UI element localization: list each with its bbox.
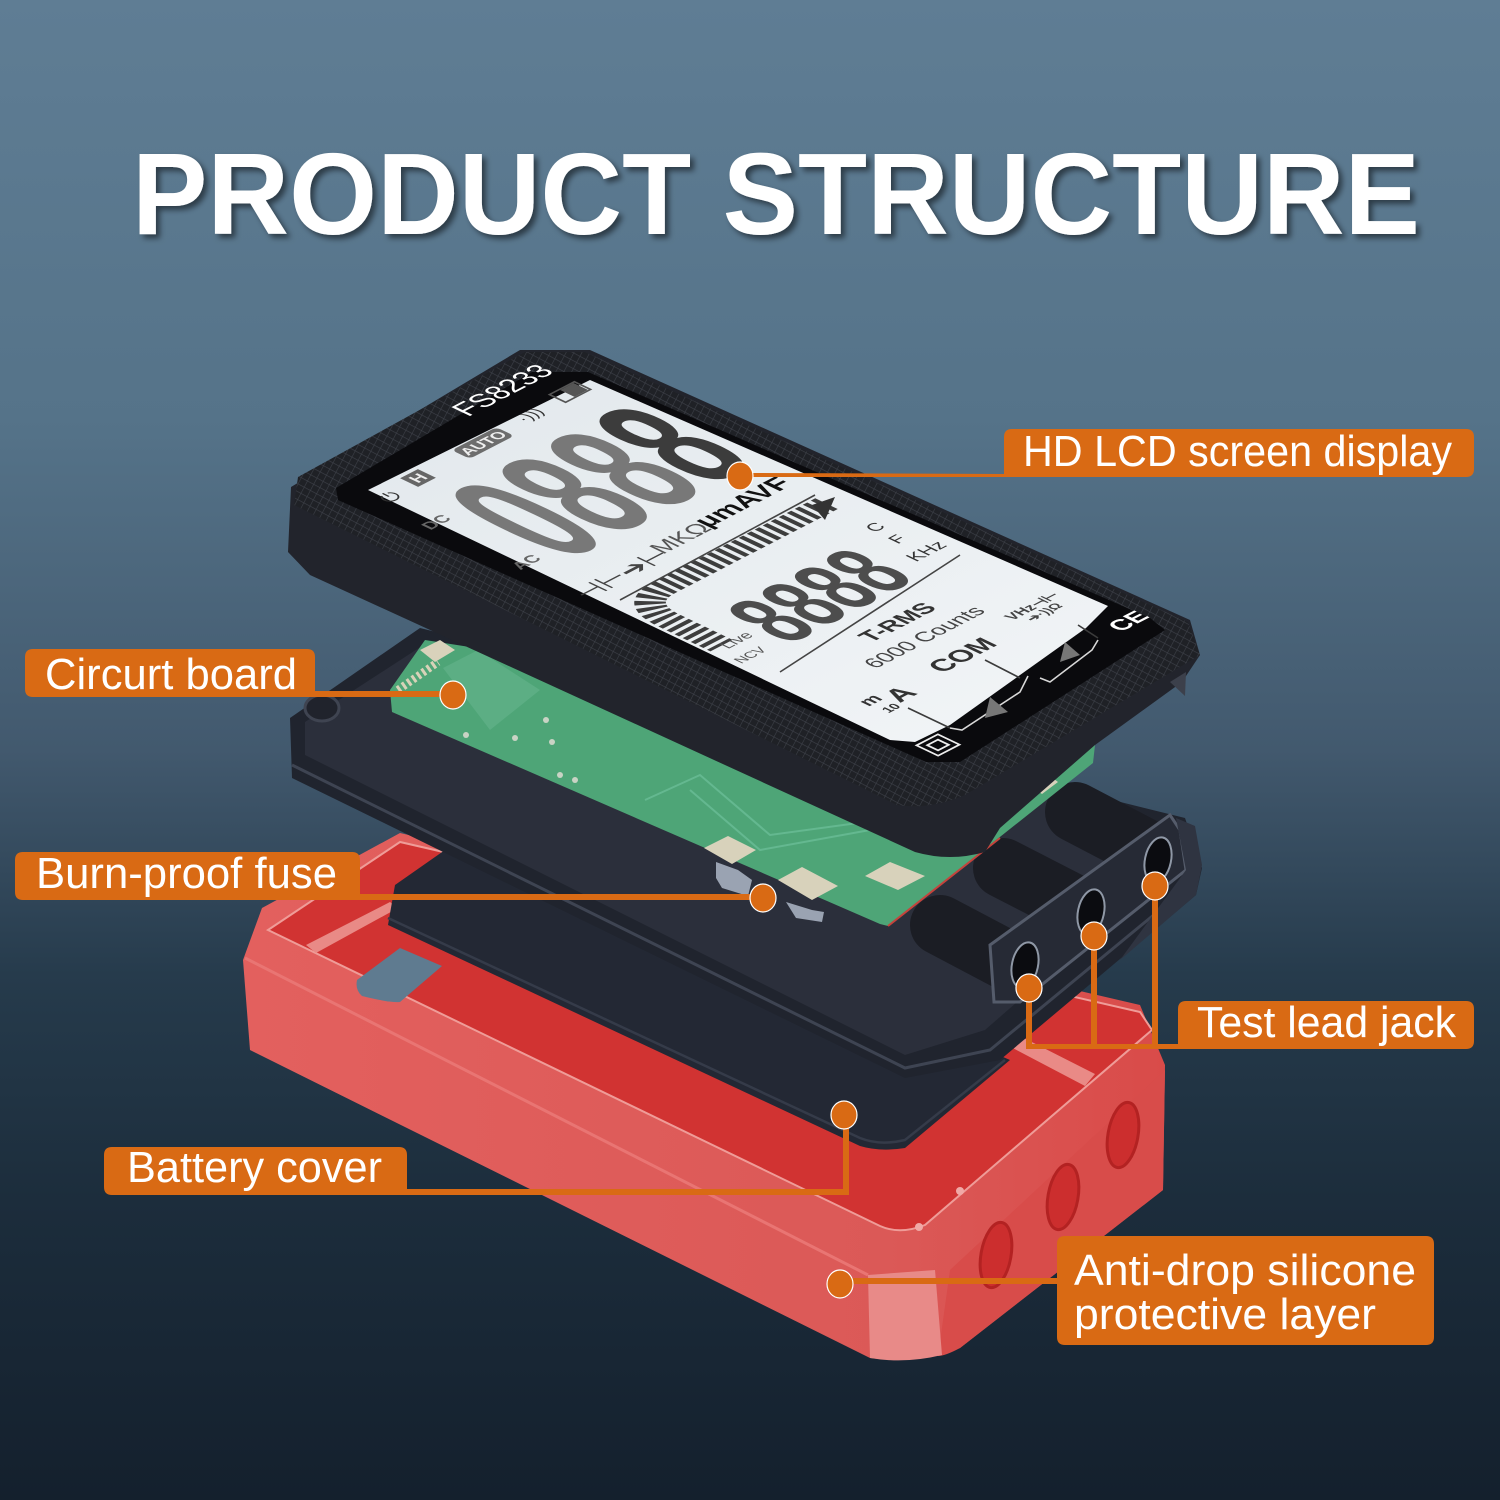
current units: μmAVF — [686, 473, 799, 531]
meter top unit: 10 — [878, 701, 904, 715]
meter top unit: NCV — [730, 644, 771, 665]
meter top unit: ➔·))Ω — [1022, 601, 1066, 623]
board vias — [463, 717, 578, 783]
hold icon: H — [404, 471, 432, 485]
lcd divider lines — [620, 495, 960, 672]
counts label: 6000 Counts — [857, 603, 991, 671]
case window slot — [357, 948, 442, 1002]
end block — [1120, 818, 1202, 960]
main reading digits: 0888 — [398, 382, 798, 581]
current jack label: A — [877, 683, 925, 706]
lcd panel — [368, 380, 1108, 742]
capacitor and diode symbols: ⊣⊢➔⊢ — [565, 545, 679, 603]
gauge arrow — [812, 497, 835, 520]
meter top unit: KHz — [902, 539, 952, 564]
meter side body — [288, 350, 1200, 857]
t-rms label: T-RMS — [852, 599, 943, 645]
red silicone protective case — [243, 833, 1165, 1360]
circuit board — [390, 640, 1095, 926]
callout: circuit board — [25, 649, 466, 709]
resistance units: MKΩ — [643, 519, 718, 557]
meter black glass — [336, 372, 1165, 762]
temperature and frequency units: C — [860, 520, 890, 534]
battery cover edge — [388, 918, 1005, 1143]
meter top unit: m — [854, 692, 888, 709]
tray screw post — [305, 695, 339, 721]
meter top unit: AC — [507, 552, 546, 572]
hold icon — [400, 469, 436, 487]
case right wall shade — [938, 1070, 1165, 1356]
jack bracket lines — [908, 625, 1098, 728]
callout: hd lcd screen display: HD LCD screen display — [1023, 427, 1452, 476]
callout: test lead jack: Test lead jack — [1197, 998, 1457, 1047]
callout: burn-proof fuse: Burn-proof fuse — [36, 849, 337, 898]
voltage jack label: VHz⊣⊢ — [1001, 590, 1065, 622]
callout: battery cover: Battery cover — [127, 1143, 382, 1192]
meter carbon fibre bezel — [294, 352, 1200, 806]
board traces — [645, 775, 880, 850]
case small pin marks — [956, 1187, 964, 1195]
auto badge: AUTO — [456, 430, 512, 458]
battery cover — [388, 850, 1010, 1150]
callout: hd lcd screen display — [727, 427, 1474, 490]
title: PRODUCT STRUCTURE — [132, 129, 1420, 259]
ncv marker: Live — [716, 630, 758, 651]
analog bar gauge — [633, 504, 915, 646]
board connector pins — [398, 662, 438, 690]
case corner highlight — [868, 1270, 942, 1360]
callout: anti-drop silicone protective layer — [827, 1236, 1434, 1345]
case interior floor — [268, 842, 1152, 1230]
signal icon: ·))) — [512, 406, 549, 424]
jack bracket lines on glass — [950, 640, 1098, 730]
battery icon — [549, 382, 591, 402]
brand name: FS8233 — [445, 361, 562, 420]
tray inner floor — [305, 642, 1180, 1055]
meter top unit: F — [883, 532, 911, 546]
callout: test lead jack — [1016, 872, 1474, 1049]
callout: anti-drop silicone protective layer: protective layer — [1074, 1290, 1376, 1339]
meter base tray — [290, 628, 1202, 1078]
board mesh area — [443, 650, 540, 730]
callout: battery cover — [104, 1101, 857, 1195]
tray rim line — [292, 765, 1190, 1068]
case upper rim edge — [245, 958, 868, 1275]
callout: circuit board: Circurt board — [45, 650, 297, 699]
board solder pads — [704, 770, 1058, 900]
power icon: ⏻ — [374, 489, 408, 506]
safety mark — [917, 734, 959, 756]
tray outer body — [290, 628, 1202, 1078]
case rim highlights — [306, 902, 1095, 1086]
fuse holder — [716, 862, 824, 922]
com label: COM — [921, 634, 1004, 676]
ce mark: CE — [1102, 608, 1156, 635]
jack sockets — [1008, 835, 1175, 990]
meter foot clip — [1170, 672, 1186, 696]
meter top unit — [288, 350, 1200, 857]
battery compartments — [940, 812, 1140, 962]
case outer walls — [243, 833, 1165, 1360]
callout: burn-proof fuse — [15, 849, 776, 912]
board red edge — [888, 838, 1000, 926]
warning triangles — [985, 642, 1080, 718]
secondary reading digits: 8888 — [700, 536, 939, 655]
dc and ac markers: DC — [417, 512, 456, 532]
jack panel — [990, 815, 1202, 1002]
callout: anti-drop silicone protective layer: Anti-drop silicone — [1074, 1246, 1416, 1295]
case jack holes — [975, 1100, 1144, 1290]
